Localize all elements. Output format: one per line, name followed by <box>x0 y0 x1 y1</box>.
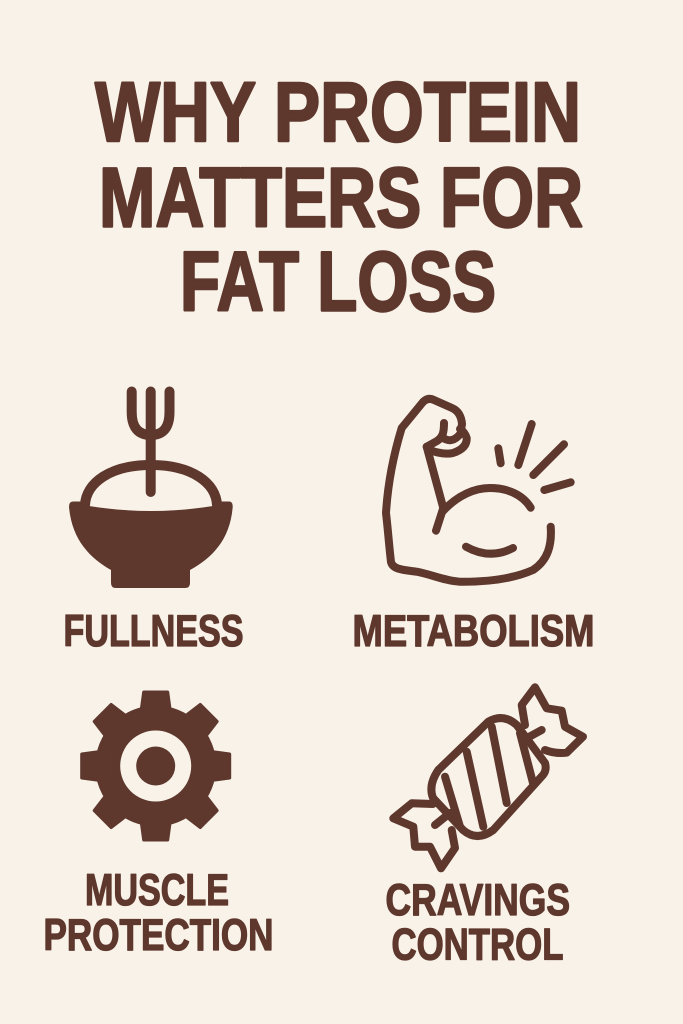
title: FAT LOSS <box>180 235 496 329</box>
label: muscle protection <box>44 866 274 960</box>
icon: flexed arm <box>386 399 571 582</box>
label: metabolism: METABOLISM <box>352 607 594 656</box>
label: fullness: FULLNESS <box>64 607 244 656</box>
title <box>95 65 583 329</box>
title: MATTERS FOR <box>99 150 583 244</box>
label: cravings control: CRAVINGS <box>386 876 570 925</box>
title: WHY PROTEIN <box>95 65 581 159</box>
label: muscle protection: MUSCLE <box>85 866 229 915</box>
icon: wrapped candy <box>393 687 583 868</box>
label: cravings control: CONTROL <box>392 920 564 970</box>
icon: gear <box>82 692 230 840</box>
icon: bowl with fork <box>69 392 233 588</box>
label: muscle protection: PROTECTION <box>44 911 274 960</box>
label: cravings control <box>386 876 570 970</box>
